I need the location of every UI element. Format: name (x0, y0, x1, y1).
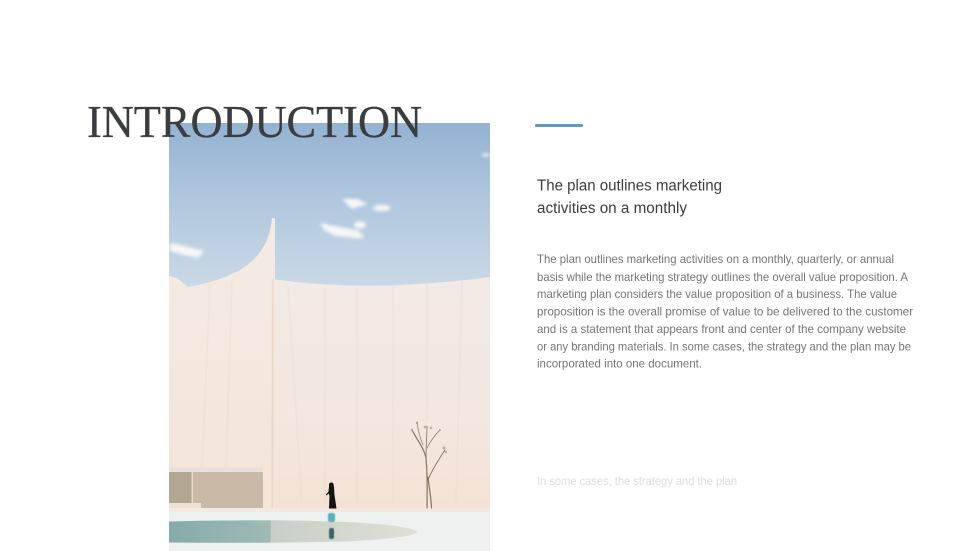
tree (411, 422, 447, 508)
accent bar (535, 124, 583, 127)
title: INTRODUCTION (87, 96, 422, 147)
subheading: The plan outlines marketing (537, 178, 722, 194)
body paragraph: basis while the marketing strategy outlines the overall value proposition. A (537, 270, 908, 284)
body paragraph: incorporated into one document. (537, 356, 702, 370)
person and reflection (326, 482, 336, 539)
shelter canopy and recess (169, 468, 263, 510)
body paragraph: and is a statement that appears front and center of the company website (537, 322, 906, 336)
subheading (537, 178, 722, 217)
left curved wall (169, 218, 275, 512)
ground (169, 508, 490, 512)
vertical wall streaks (202, 281, 462, 505)
pool ellipse (169, 520, 417, 543)
faint caption: In some cases, the strategy and the plan (537, 474, 737, 488)
body paragraph (537, 252, 913, 370)
sky (169, 123, 490, 293)
body paragraph: proposition is the overall promise of value to be delivered to the customer (537, 304, 913, 318)
clouds (170, 154, 490, 258)
body paragraph: or any branding materials. In some cases, the strategy and the plan may be (537, 340, 911, 354)
wall seam shadow (272, 279, 273, 512)
water surface (169, 512, 490, 551)
body paragraph: The plan outlines marketing activities on a monthly, quarterly, or annual (537, 252, 894, 266)
subheading: activities on a monthly (537, 200, 687, 217)
far right wall (271, 277, 490, 512)
body paragraph: marketing plan considers the value proposition of a business. The value (537, 287, 897, 301)
photo: white curved architecture under blue sky (169, 123, 490, 551)
